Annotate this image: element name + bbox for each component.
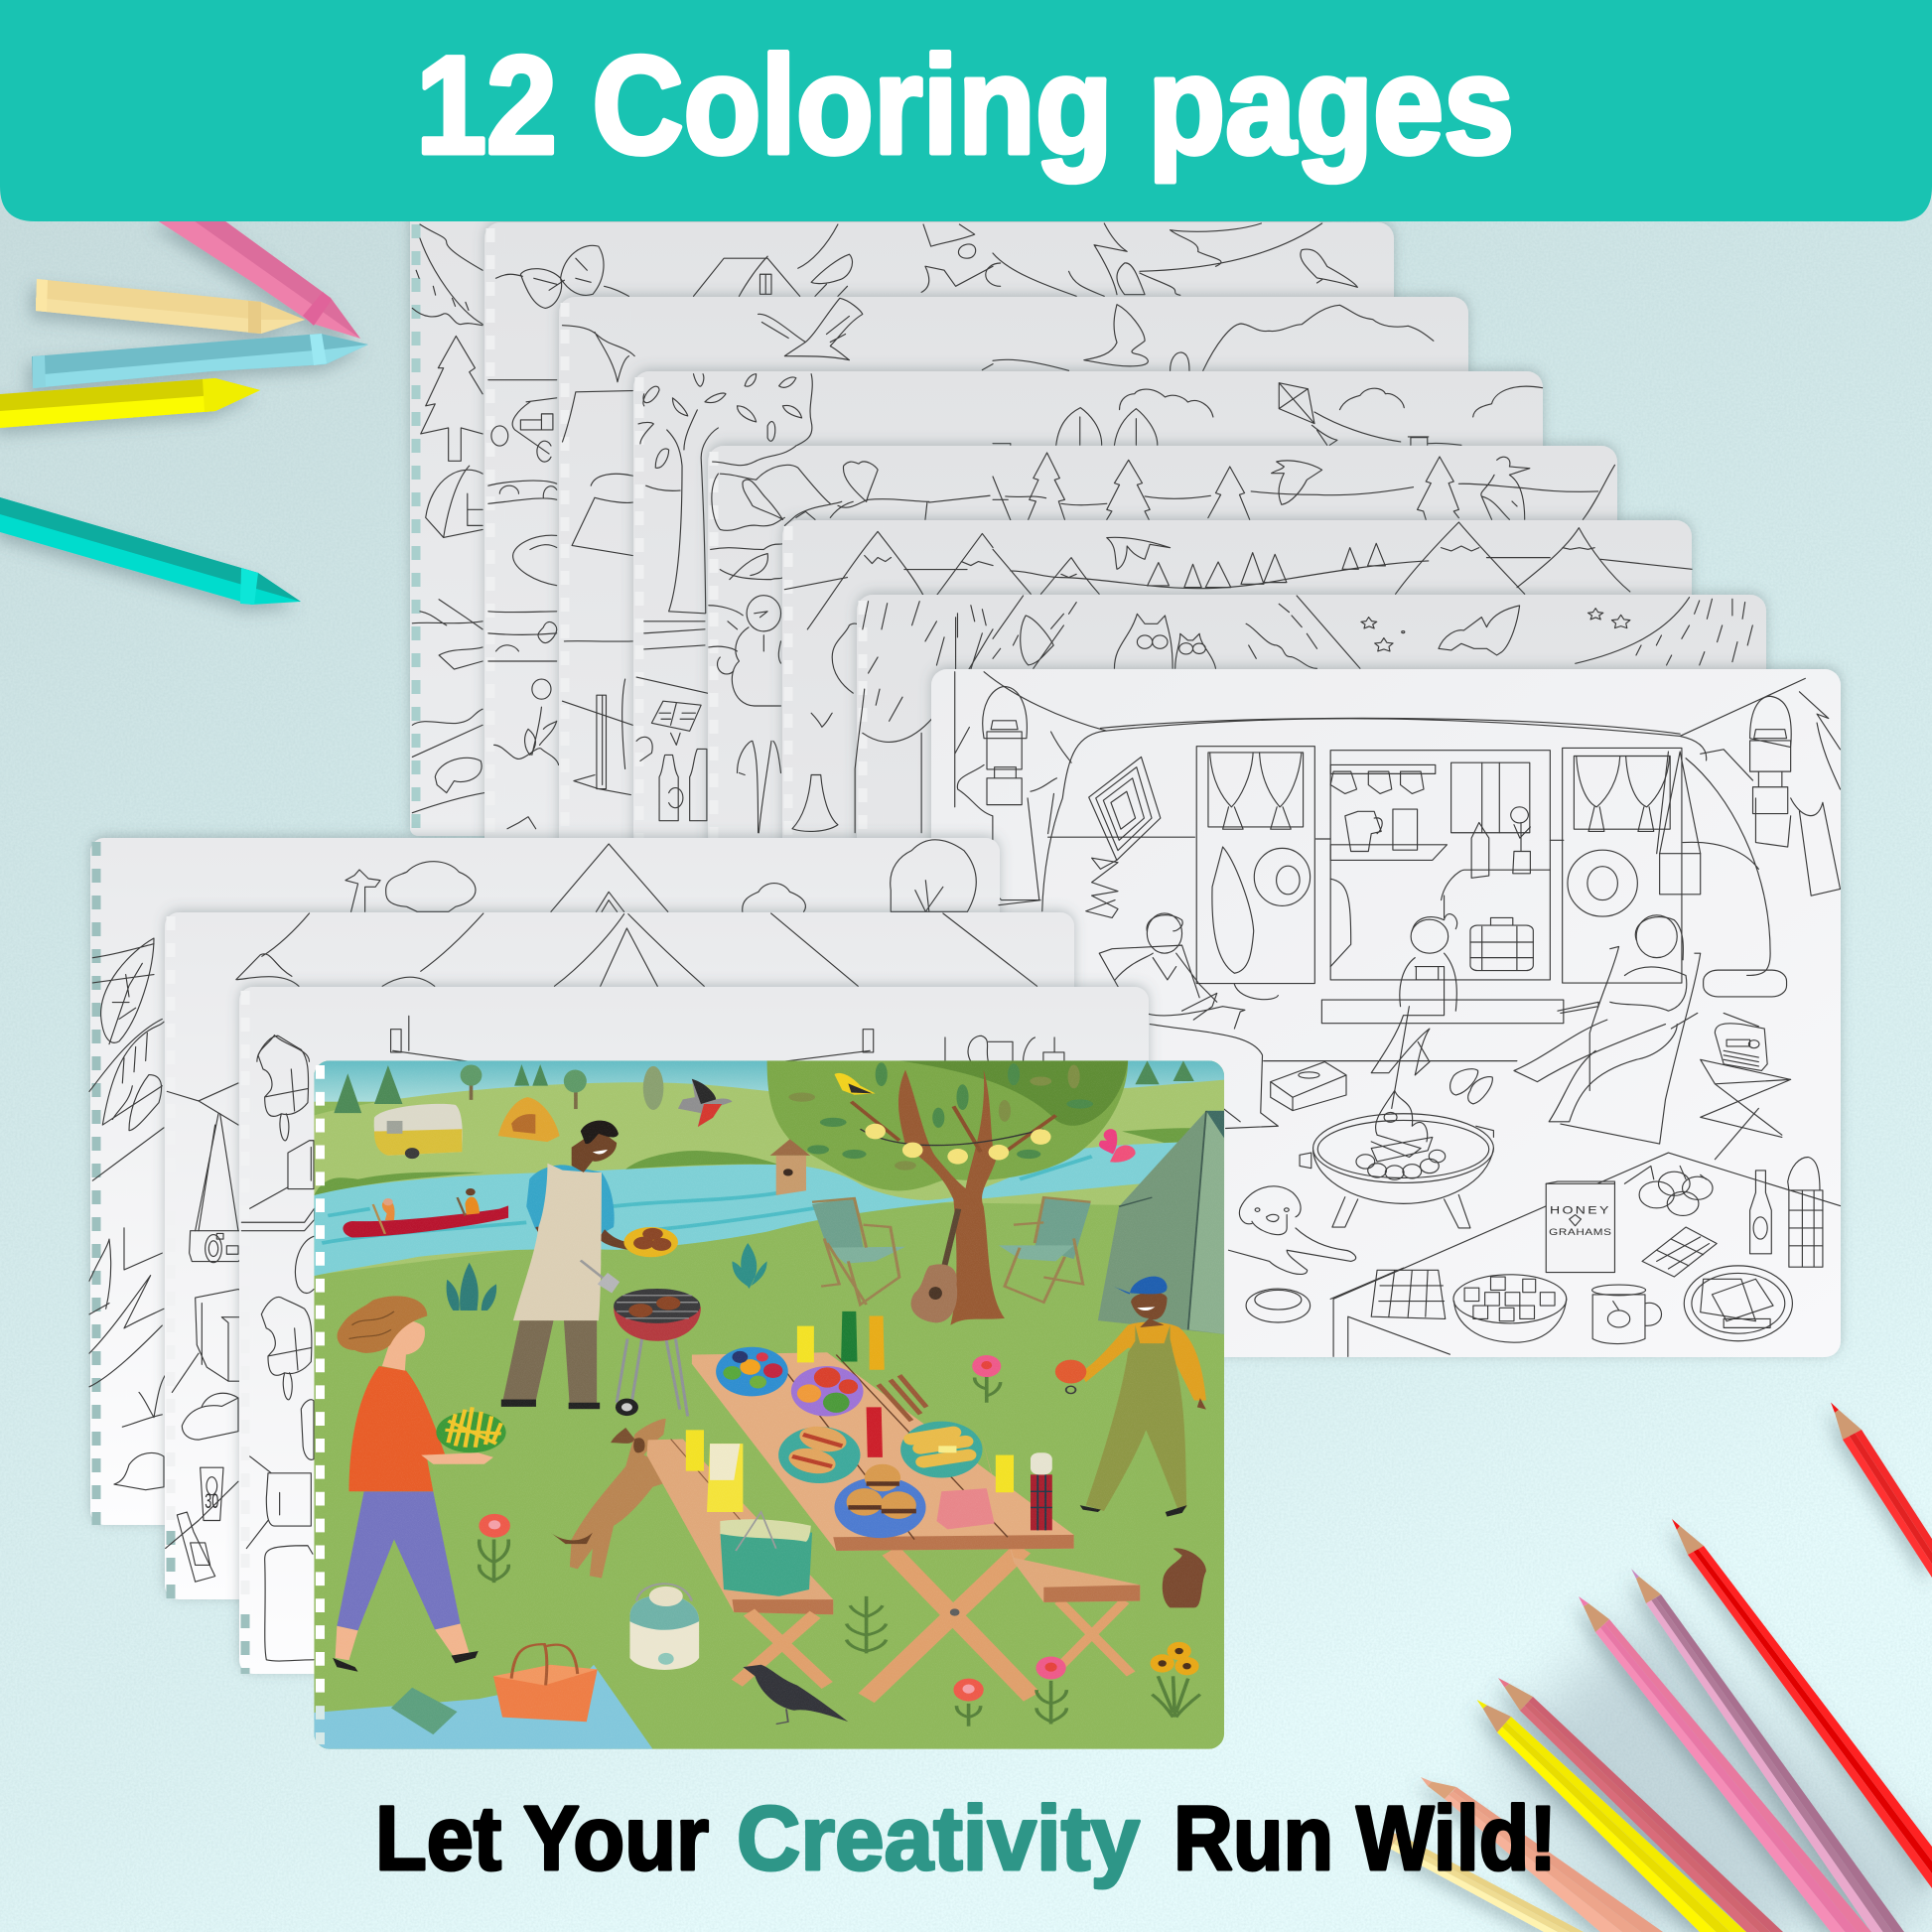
- boy with overalls and compass: [1055, 1277, 1206, 1517]
- crayon: teal: [0, 497, 301, 605]
- plate fruit: [716, 1347, 788, 1396]
- bird red-breasted: [678, 1079, 732, 1127]
- crayon: cream: [36, 279, 305, 334]
- blanket and book: [314, 1665, 652, 1749]
- line art: radio and stool: [1701, 1013, 1791, 1160]
- tagline: Let Your Creativity Run Wild!: [375, 1788, 1557, 1889]
- camp chair left: [812, 1197, 905, 1305]
- grass base and sky: [314, 1060, 1224, 1749]
- line art: picnic table items: GRAHAMS: [1549, 1228, 1612, 1238]
- pencil: cream: [1385, 1832, 1584, 1932]
- small orange tent: [498, 1097, 560, 1142]
- green tent: [1098, 1111, 1224, 1334]
- large tree: [767, 1060, 1128, 1325]
- water jug: [629, 1584, 699, 1670]
- woman carrying fries: [333, 1296, 506, 1672]
- lower page 2: tent poles, camera, suitcases, flip flops, sunscreen: [165, 912, 1074, 1599]
- background trees: [334, 1060, 1194, 1113]
- trailer: [374, 1104, 463, 1159]
- stack of lower coloring pages, left group: [89, 838, 1149, 1674]
- butterfly: [1099, 1129, 1136, 1163]
- orange basket: [493, 1644, 598, 1722]
- line art: woman in chair: [1514, 915, 1701, 1144]
- plate hot dogs: [778, 1422, 861, 1483]
- plate burgers: [834, 1464, 926, 1538]
- tagline: Let Your Creativity Run Wild!: Run Wild!: [1173, 1788, 1557, 1889]
- goldfinch: [834, 1073, 876, 1095]
- stack of eight coloring pages, back group: [410, 148, 1841, 1357]
- line art: lanterns and trees: [955, 672, 1841, 900]
- lower page 3: life vests, hammock poles, jerry can: [239, 987, 1149, 1674]
- string lights: [865, 1124, 1051, 1165]
- pencil: lilac: [1631, 1569, 1904, 1932]
- crayon: pink: [154, 218, 360, 339]
- line art: trailer body: [984, 672, 1805, 1061]
- plate salad: [791, 1366, 864, 1417]
- flowers: [479, 1355, 1200, 1726]
- crayon: yellow: [0, 378, 260, 428]
- soft shadow under pencils: [1489, 1608, 1932, 1932]
- page 1: [410, 148, 1319, 836]
- pencil: pink: [1579, 1596, 1871, 1932]
- line art: dog and bowl: [1228, 1186, 1356, 1322]
- colored pencils bottom right: [1385, 1402, 1932, 1932]
- page 5: moose, birds, snowman, pines, hiker: [708, 446, 1617, 1134]
- page 3: eagle, mountain, hawk: [559, 297, 1468, 985]
- lower page 2: tent poles, camera, suitcases, flip flops, sunscreen: 30: [205, 1489, 219, 1513]
- river: [314, 1142, 1188, 1276]
- page 2: butterfly, cabin, bird: [484, 222, 1394, 910]
- header banner: [0, 0, 1932, 221]
- guitar: [911, 1209, 958, 1322]
- lower page 1: giraffe, tree, leaves, turtle: [89, 838, 1040, 1525]
- drinks and condiments: [686, 1311, 1014, 1512]
- line art: man reading: [1099, 913, 1278, 1128]
- plate corn: [900, 1422, 983, 1478]
- plants: [447, 1243, 767, 1311]
- pencil: rose: [1498, 1678, 1783, 1932]
- crow: [743, 1665, 848, 1725]
- squirrel: [1163, 1548, 1206, 1607]
- pencil: far red: [1831, 1402, 1932, 1578]
- canoe with paddlers: [343, 1188, 508, 1238]
- heading: 12 Coloring pages: 12 Coloring pages: [416, 27, 1514, 183]
- cutlery: [879, 1375, 926, 1421]
- picnic table legs and right bench: [867, 1433, 1140, 1698]
- line art: fire pit: [1300, 1091, 1493, 1228]
- page 8: camper front line-art page: [931, 669, 1841, 1357]
- page 6: mountains, stump, duck: [782, 520, 1692, 1208]
- tagline: Let Your Creativity Run Wild!: Let Your: [375, 1788, 709, 1889]
- line art: picnic table items: HONEY: [1550, 1204, 1611, 1216]
- pencil: yellow: [1477, 1700, 1746, 1932]
- plate of burgers: [623, 1227, 678, 1257]
- page 4: tree, book, clouds, kite: [622, 371, 1543, 1059]
- crayons top left: [0, 218, 368, 605]
- spiral holes on colored page: [313, 1065, 328, 1744]
- picnic table top: [692, 1352, 1074, 1551]
- birdhouse: [770, 1139, 810, 1195]
- colored illustration page: campsite picnic: [314, 1060, 1224, 1749]
- line art: picnic table items: [1330, 1153, 1841, 1356]
- page 7: owls, bat, stars: [855, 595, 1766, 1283]
- pencil: peach: [1421, 1777, 1663, 1932]
- picnic table bench left: [646, 1440, 833, 1685]
- crayon: blue: [32, 334, 368, 388]
- checkered napkin and thermos: [936, 1452, 1052, 1530]
- camp chair right: [999, 1197, 1091, 1303]
- line art: girl with marshmallow stick: [1371, 914, 1457, 1108]
- river banks: [314, 1128, 1224, 1195]
- pencil: red: [1672, 1519, 1932, 1888]
- line art: kite: [1086, 757, 1161, 917]
- tagline: Let Your Creativity Run Wild!: Creativity: [737, 1788, 1140, 1889]
- line art: toolbox and slippers: [1271, 1062, 1492, 1111]
- man with apron and spatula: [501, 1121, 631, 1409]
- kettle grill: [614, 1289, 701, 1417]
- dog jumping: [550, 1419, 675, 1579]
- cooler bag: [720, 1512, 812, 1596]
